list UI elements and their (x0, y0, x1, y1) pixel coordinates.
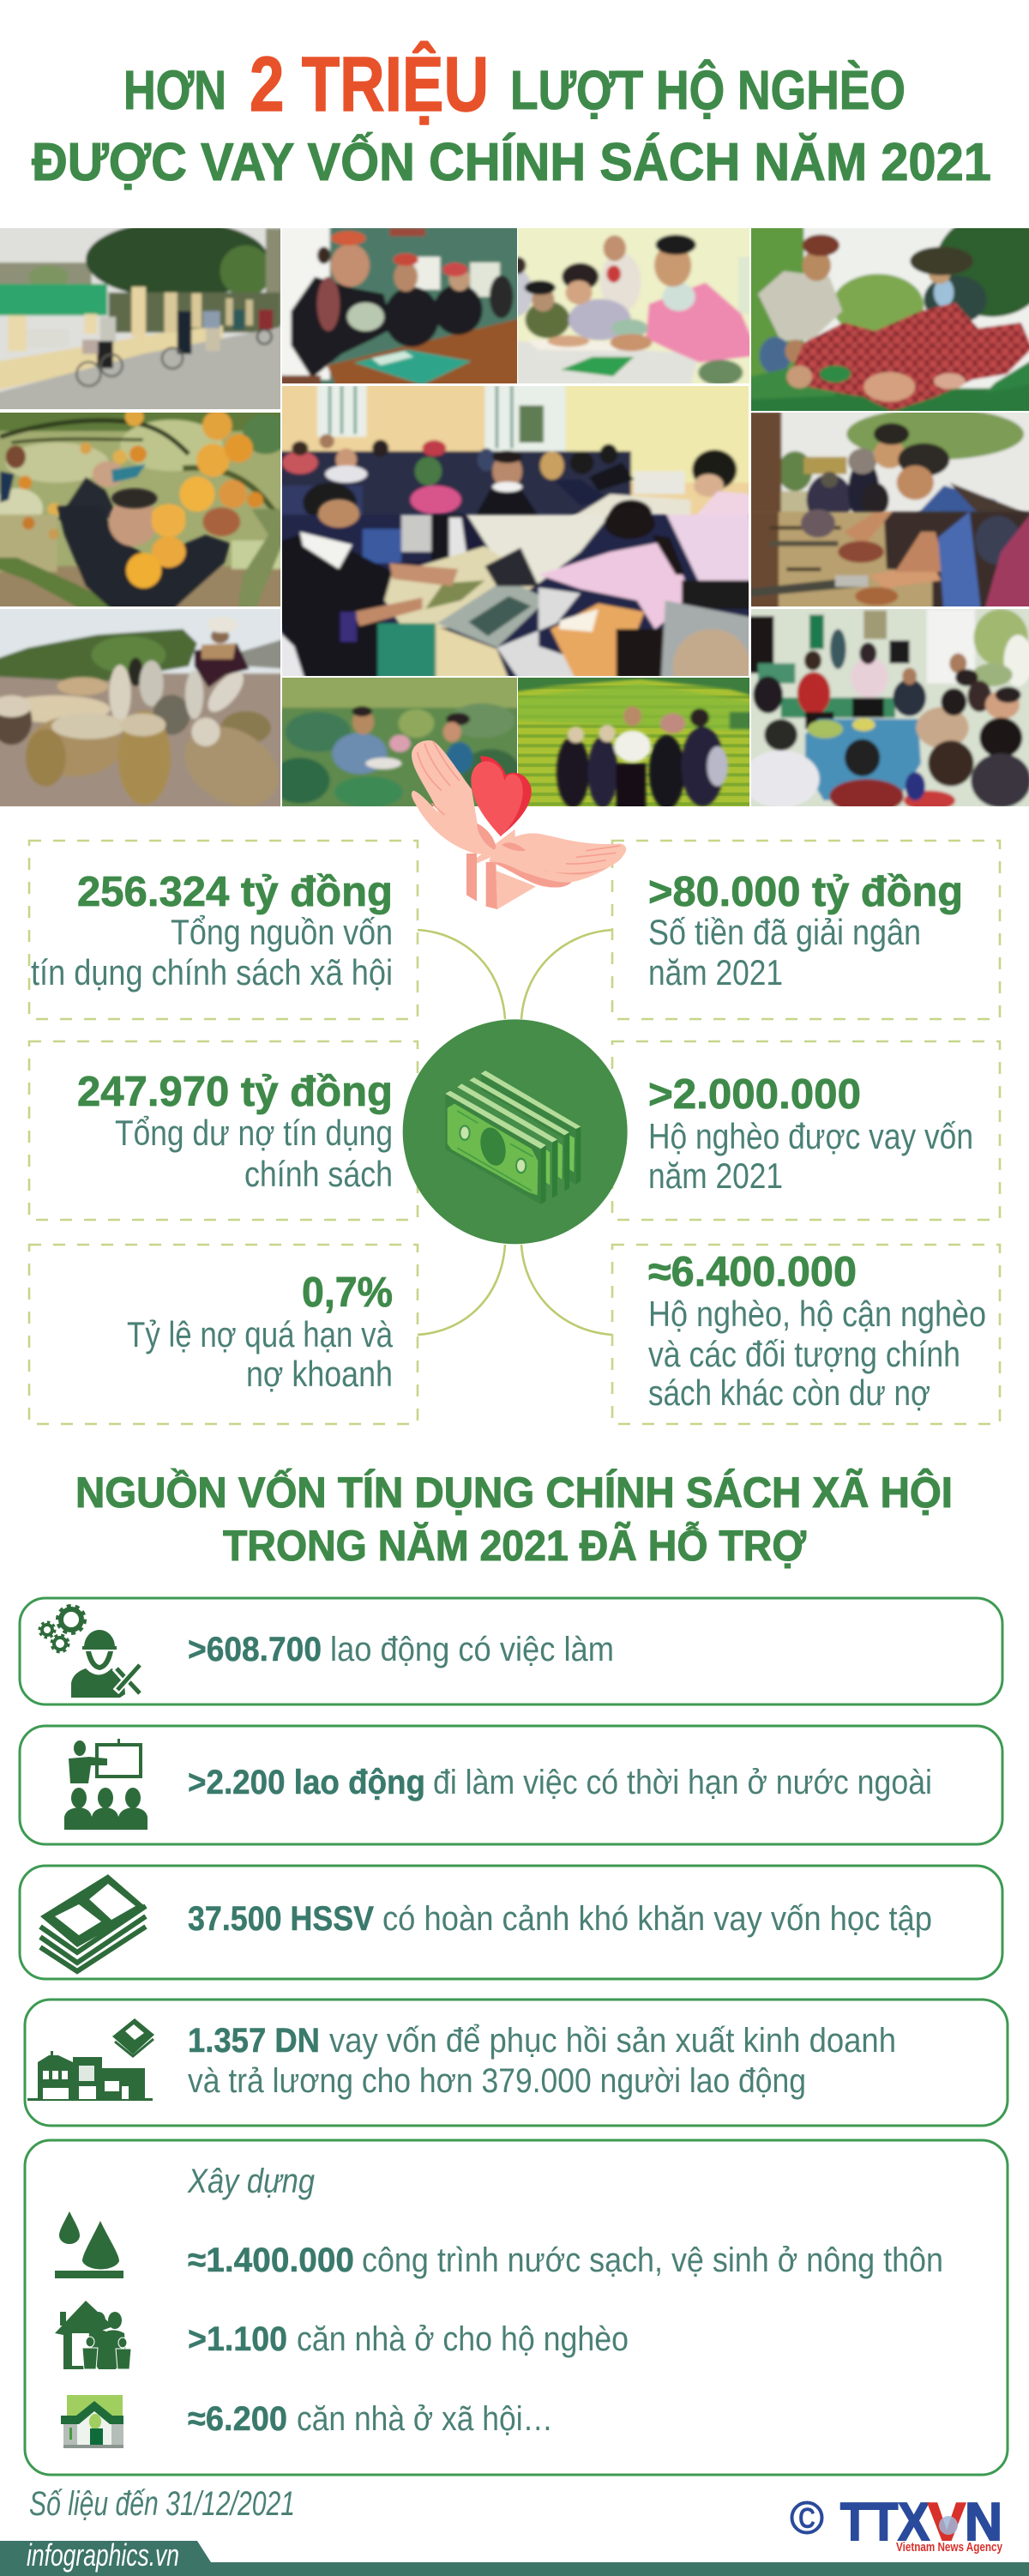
stats panels (29, 740, 1000, 1424)
stat: total outstanding loans: 247.970 tỷ đồng (77, 1069, 393, 1115)
icon: social housing (61, 2395, 123, 2448)
icon: worker with gears (39, 1606, 141, 1698)
panel: enterprises (25, 2000, 1008, 2126)
stat: households with outstanding debt: và các đối tượng chính (648, 1334, 960, 1374)
logo: TTXVN: V (928, 2493, 966, 2552)
heading: construction: Xây dựng (187, 2163, 315, 2200)
text: social houses: căn nhà ở xã hội… (297, 2400, 553, 2438)
icon: stack of banknotes (40, 1874, 147, 1971)
icon: house with family (55, 2301, 131, 2369)
title (32, 40, 991, 192)
text: students: có hoàn cảnh khó khăn vay vốn học tập (382, 1900, 932, 1938)
stat: poor households borrowing: năm 2021 (648, 1155, 783, 1196)
photo: lychee harvest (751, 228, 1029, 411)
text: enterprises: vay vốn để phục hồi sản xuất kinh doanh (329, 2022, 896, 2060)
stat: disbursed amount: >80.000 tỷ đồng (648, 869, 963, 915)
text: workers employed: >608.700 (188, 1631, 322, 1668)
logo: TTXVN (792, 2493, 1003, 2555)
icon: water drops (55, 2211, 123, 2278)
text: houses for poor households (188, 2320, 629, 2358)
text: houses for poor households: căn nhà ở cho hộ nghèo (297, 2320, 629, 2358)
icon: money in green circle (403, 1019, 628, 1244)
photo: sheep and shepherd (0, 609, 280, 806)
icon: hands holding a heart (412, 740, 626, 909)
logo: TTXVN: TTX (840, 2493, 930, 2552)
logo: TTXVN: N (965, 2493, 1002, 2552)
text: social houses (188, 2400, 553, 2438)
photo: lotus pond (282, 678, 517, 806)
title: ĐƯỢC VAY VỐN CHÍNH SÁCH NĂM 2021 (32, 133, 991, 192)
stat: overdue debt rate (29, 1245, 418, 1424)
text: enterprises: và trả lương cho hơn 379.000 người lao động (188, 2062, 806, 2100)
connector curves (418, 930, 612, 1335)
stat: households with outstanding debt: sách khác còn dư nợ (648, 1372, 930, 1413)
text: students: 37.500 HSSV (188, 1900, 374, 1938)
stat: disbursed amount: năm 2021 (648, 952, 783, 992)
photo: man picking oranges (0, 413, 280, 606)
stat: overdue debt rate: Tỷ lệ nợ quá hạn và (127, 1314, 394, 1354)
stat: total outstanding loans (29, 1041, 418, 1220)
text: clean water works: công trình nước sạch, vệ sinh ở nông thôn (362, 2241, 943, 2279)
text: overseas workers (188, 1764, 932, 1801)
panel: overseas labour (20, 1726, 1002, 1844)
stat: disbursed amount: Số tiền đã giải ngân (648, 912, 921, 952)
title: LƯỢT HỘ NGHÈO (510, 58, 906, 121)
icon: presenter and audience (64, 1739, 147, 1830)
photo: ethnic women counting money (282, 228, 517, 383)
logo: TTXVN: C (798, 2502, 815, 2535)
stat: overdue debt rate: nợ khoanh (246, 1354, 393, 1394)
photo: woman in pink at counter (518, 228, 749, 383)
stat: households with outstanding debt (612, 1245, 1000, 1424)
photo: cyclists on road (0, 228, 280, 409)
footer banner (0, 2537, 1029, 2576)
stat: total credit capital: 256.324 tỷ đồng (77, 869, 393, 915)
text: enterprises (188, 2022, 896, 2100)
text: workers employed (188, 1631, 614, 1668)
stat: total credit capital (29, 841, 418, 1019)
stat: overdue debt rate: 0,7% (302, 1270, 393, 1316)
photo collage (0, 214, 1029, 823)
panel: construction (25, 2140, 1008, 2475)
title: 2 TRIỆU (250, 40, 489, 128)
photo: bank transaction room (282, 386, 749, 676)
stat: total credit capital: tín dụng chính sách xã hội (31, 952, 393, 992)
panel: students (20, 1866, 1002, 1979)
photo: rice terraces and group (518, 678, 749, 806)
text: social houses: ≈6.200 (188, 2400, 287, 2438)
text: houses for poor households: >1.100 (188, 2320, 287, 2358)
section heading (75, 1468, 953, 1570)
text: workers employed: lao động có việc làm (330, 1631, 614, 1668)
section heading: NGUỒN VỐN TÍN DỤNG CHÍNH SÁCH XÃ HỘI (75, 1468, 953, 1517)
title: HƠN (123, 59, 226, 121)
photo: community meeting with fruit (751, 609, 1029, 806)
logo: TTXVN: Vietnam News Agency (896, 2540, 1003, 2555)
text: enterprises: 1.357 DN (188, 2022, 320, 2060)
icon: buildings and money (27, 2018, 154, 2101)
text: students (188, 1900, 932, 1938)
text: overseas workers: >2.200 lao động (188, 1764, 425, 1801)
stat: poor households borrowing (612, 1041, 1000, 1220)
data date note: Số liệu đến 31/12/2021 (29, 2485, 295, 2523)
text: overseas workers: đi làm việc có thời hạn ở nước ngoài (433, 1764, 932, 1801)
stat: total outstanding loans: Tổng dư nợ tín dụng (115, 1113, 393, 1153)
photo: women washing at water pipe (741, 408, 1029, 612)
text: clean water works: ≈1.400.000 (188, 2241, 354, 2279)
stat: households with outstanding debt: ≈6.400.000 (648, 1249, 857, 1295)
stat: disbursed amount (612, 841, 1000, 1019)
stat: poor households borrowing: >2.000.000 (648, 1071, 861, 1118)
stat: poor households borrowing: Hộ nghèo được vay vốn (648, 1116, 973, 1156)
section heading: TRONG NĂM 2021 ĐÃ HỖ TRỢ (223, 1522, 806, 1570)
panel: jobs (20, 1598, 1002, 1704)
stat: total credit capital: Tổng nguồn vốn (171, 912, 393, 952)
stat: total outstanding loans: chính sách (244, 1154, 393, 1194)
footer banner: infographics.vn (27, 2537, 179, 2573)
